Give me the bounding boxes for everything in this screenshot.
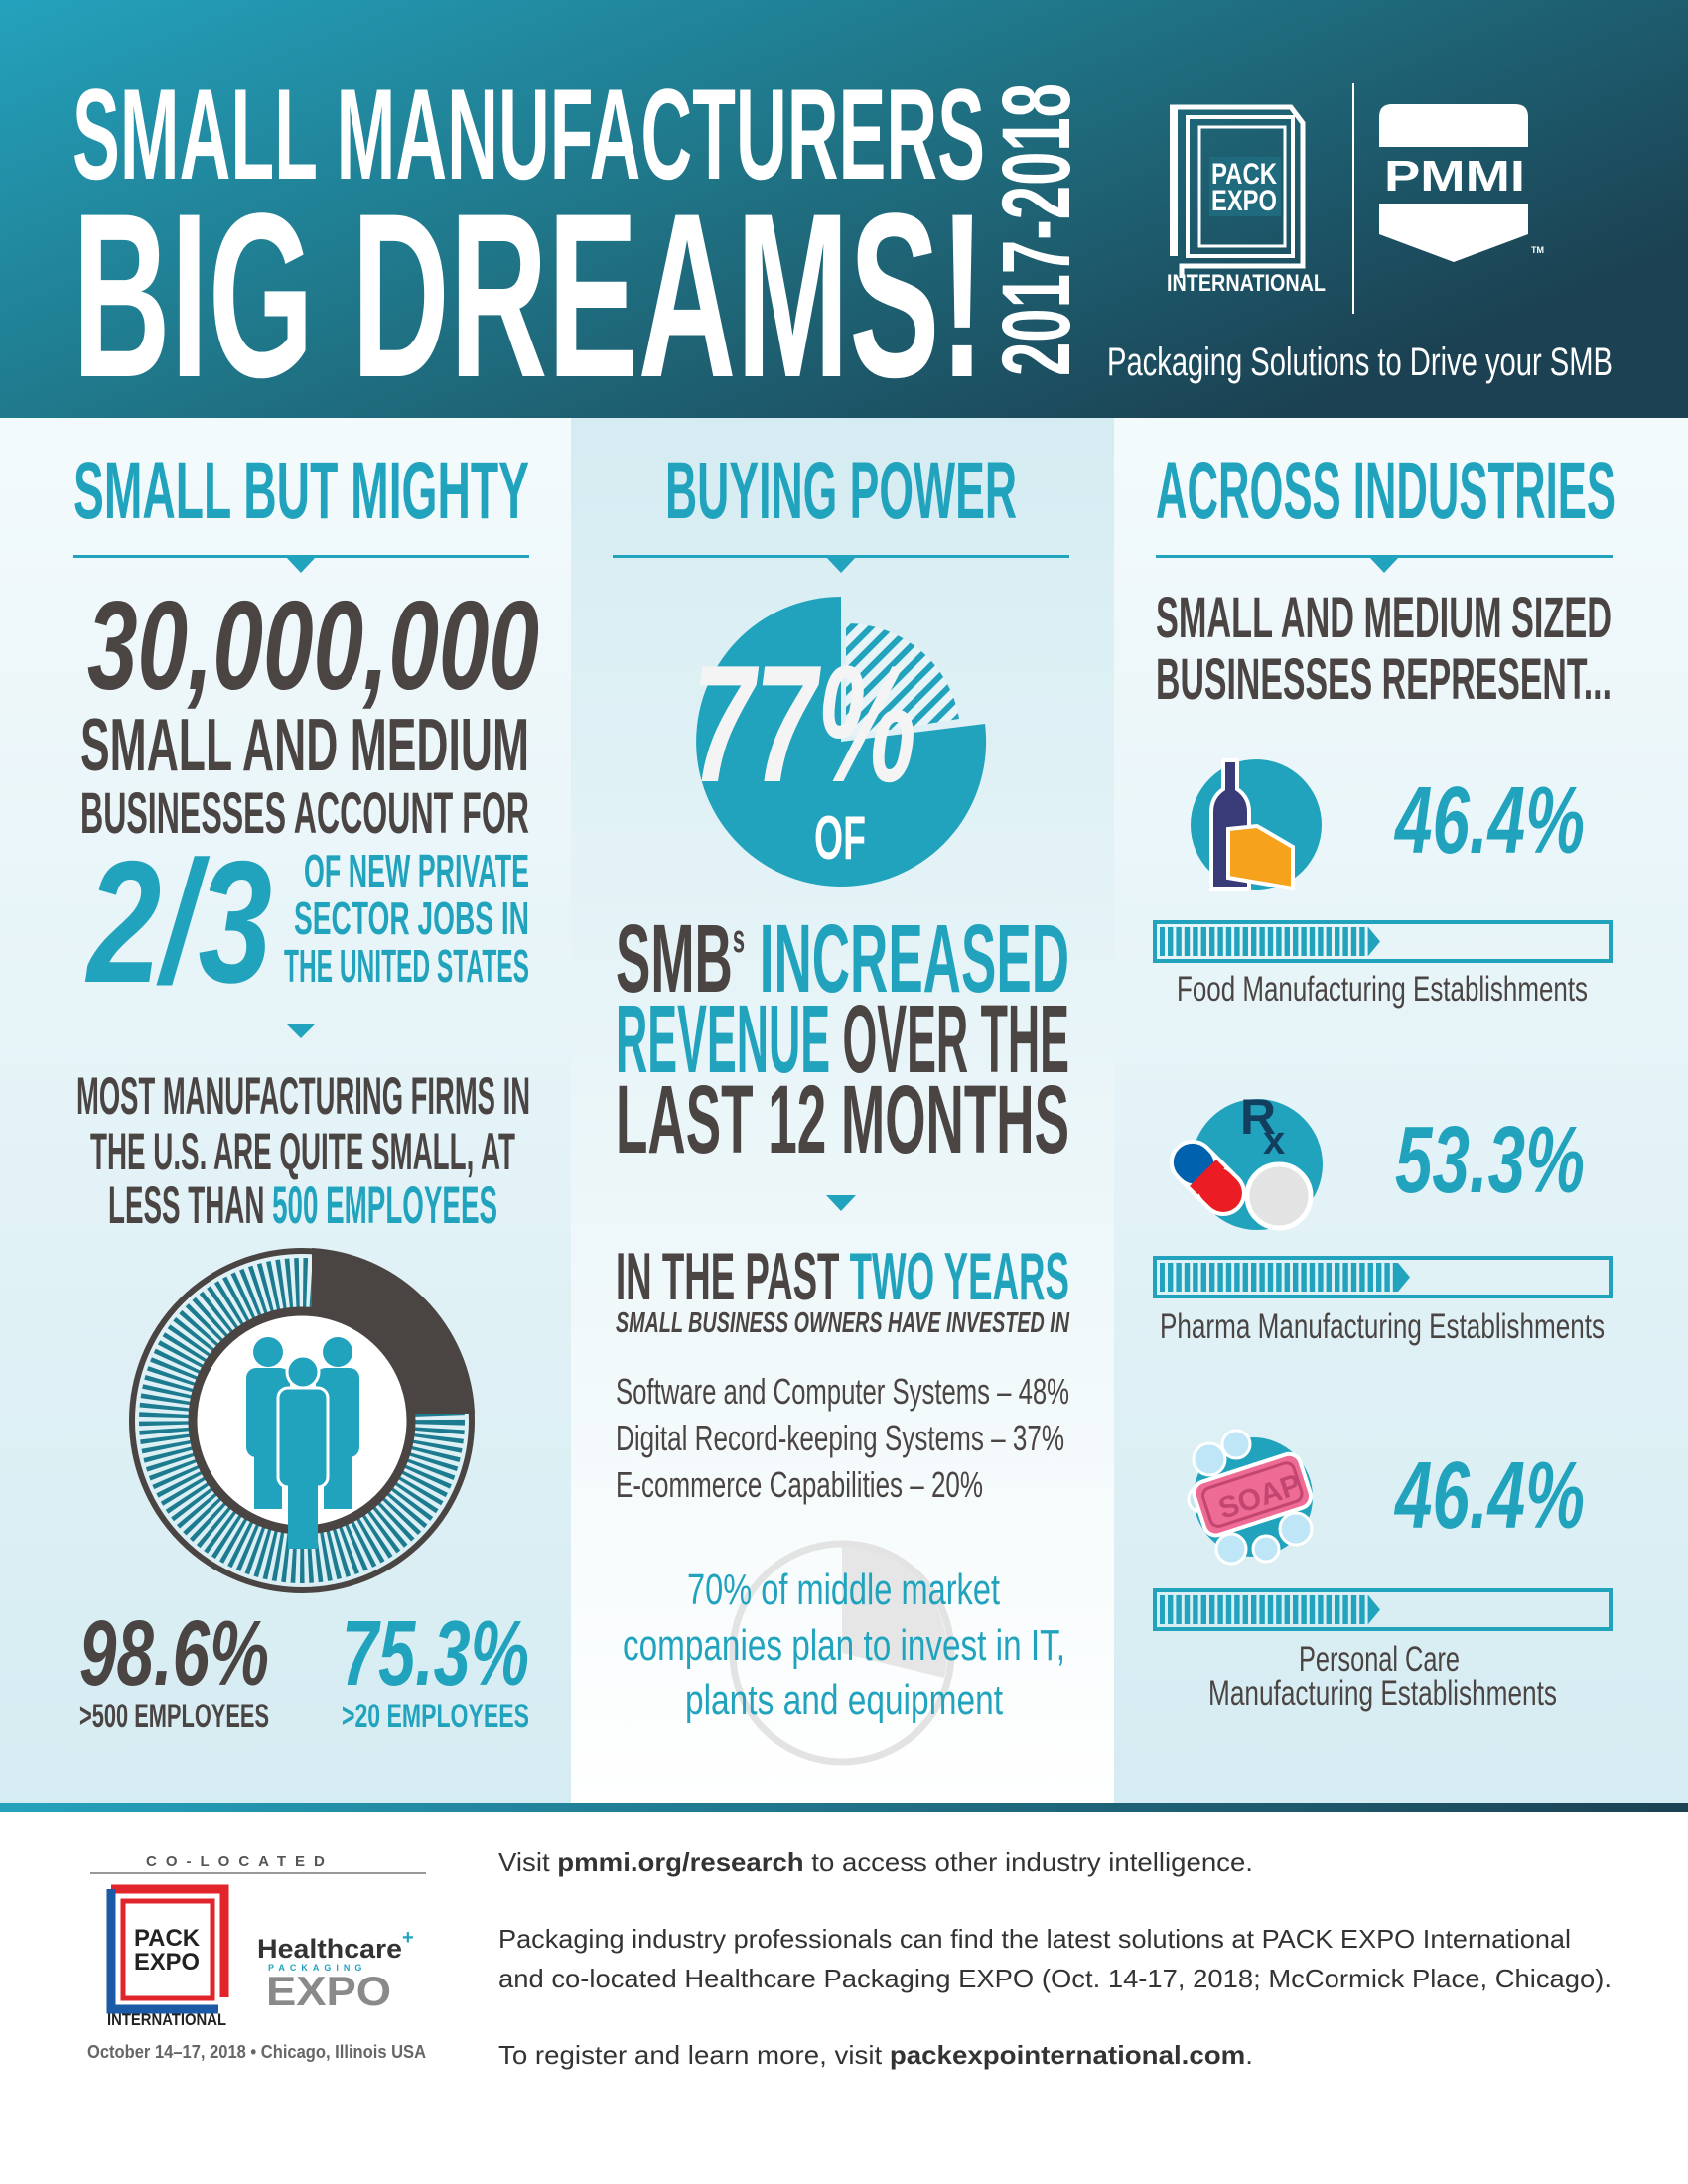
stat: food 46.4%: 46.4%: [1394, 767, 1585, 874]
text: past two years: IN THE PAST TWO YEARS: [616, 1239, 1069, 1314]
logo: pack expo international: EXPO: [1211, 185, 1277, 217]
panel: across industries: Manufacturing Establishments: [1208, 1674, 1557, 1712]
logo: pack expo international: [1167, 107, 1326, 297]
footer: co-located logos: [87, 1853, 426, 2062]
header banner: [0, 0, 1688, 427]
panel: buying power: REVENUE OVER THE: [616, 985, 1069, 1093]
logo: pack expo colour: PACK: [134, 1925, 201, 1952]
icon: pharma: [1160, 1089, 1323, 1230]
logo: pmmi shield: TM: [1531, 245, 1544, 255]
logo: pack expo international: INTERNATIONAL: [1167, 270, 1326, 297]
logo: healthcare packaging expo: EXPO: [266, 1968, 391, 2014]
panel: small but mighty: >500 EMPLOYEES: [79, 1698, 269, 1735]
panel: small but mighty: BUSINESSES ACCOUNT FOR: [80, 781, 529, 846]
stat: personal care 46.4%: 46.4%: [1394, 1442, 1585, 1549]
text: most firms small: MOST MANUFACTURING FIRMS IN: [76, 1067, 530, 1126]
panel: small but mighty: [73, 446, 539, 1735]
stat: 98.6%: 98.6%: [79, 1601, 269, 1705]
panel: across industries: [1155, 446, 1616, 1712]
logo: pmmi shield: PMMI: [1384, 152, 1525, 201]
panel: buying power: SMALL BUSINESS OWNERS HAVE INVESTED IN: [616, 1307, 1070, 1339]
pie chart 77%: [692, 597, 986, 887]
logo: healthcare packaging expo: [257, 1927, 414, 2014]
text: increased revenue: SMB: [616, 904, 830, 1013]
2/3 stat: 2/3: [85, 826, 272, 1020]
logo: pmmi shield: [1379, 104, 1544, 262]
big number: 30,000,000: [87, 575, 539, 716]
callout: 70% middle market: [623, 1566, 1065, 1724]
icon: people: [246, 1337, 359, 1549]
title: small manufacturers: SMALL MANUFACTURERS: [72, 62, 985, 206]
bar: food: [1155, 922, 1611, 961]
text: increased revenue: s: [733, 917, 745, 961]
icon: pharma: x: [1263, 1119, 1285, 1162]
panel: small but mighty: THE U.S. ARE QUITE SMALL, AT: [90, 1123, 515, 1181]
heading: BUYING POWER: [665, 446, 1017, 536]
bar: pharma: [1155, 1258, 1611, 1297]
logo: pack expo colour: EXPO: [134, 1949, 200, 1976]
stat: pharma 53.3%: 53.3%: [1395, 1107, 1585, 1213]
logo: pack expo international: PACK: [1211, 158, 1277, 191]
title: big dreams: BIG DREAMS!: [72, 165, 985, 427]
panel: small but mighty: OF NEW PRIVATE: [304, 845, 529, 896]
bar: personal care: [1155, 1590, 1611, 1629]
footer: co-located logos: October 14–17, 2018 • Chicago, Illinois USA: [87, 2042, 426, 2062]
panel: across industries: Personal Care: [1299, 1640, 1460, 1679]
pie chart 77%: OF: [814, 804, 866, 873]
footer: info text: and co-located Healthcare Packaging EXPO (Oct. 14-17, 2018; McCormick Place, Chicago).: [498, 1964, 1612, 1993]
panel: small but mighty: >20 EMPLOYEES: [342, 1698, 529, 1735]
panel: small but mighty: SMALL AND MEDIUM: [80, 703, 529, 786]
list: investments: E-commerce Capabilities – 20%: [616, 1464, 983, 1505]
callout: 70% middle market: companies plan to invest in IT,: [623, 1621, 1065, 1670]
icon: wine and cheese: [1191, 759, 1322, 890]
icon: faint clock: [733, 1544, 951, 1762]
text: increased revenue: INCREASED: [745, 904, 1069, 1013]
logo: healthcare packaging expo: Healthcare: [257, 1934, 402, 1964]
panel: buying power: LAST 12 MONTHS: [616, 1065, 1069, 1173]
donut chart: [132, 1248, 475, 1590]
logo: healthcare packaging expo: +: [402, 1927, 414, 1949]
panel: small but mighty: LESS THAN 500 EMPLOYEES: [108, 1176, 497, 1235]
footer: co-located logos: CO-LOCATED: [146, 1853, 334, 1870]
pie chart 77%: 77%: [692, 630, 916, 817]
list: investments: Digital Record-keeping Systems – 37%: [616, 1418, 1064, 1458]
panel backgrounds: [0, 418, 1688, 1803]
panel: small but mighty: SECTOR JOBS IN: [294, 892, 529, 944]
callout: 70% middle market: 70% of middle market: [687, 1566, 1000, 1614]
callout: 70% middle market: plants and equipment: [685, 1676, 1003, 1724]
panel: small but mighty: THE UNITED STATES: [284, 940, 529, 992]
logo: pack expo colour: INTERNATIONAL: [107, 2010, 226, 2029]
list: investments: [616, 1371, 1069, 1505]
footer: info text: Packaging industry professionals can find the latest solutions at PACK EXPO International: [498, 1924, 1571, 1954]
stat: 75.3%: 75.3%: [342, 1601, 529, 1705]
footer: info text: [498, 1847, 1612, 2070]
heading: SMALL BUT MIGHTY: [73, 446, 529, 536]
footer: info text: To register and learn more, visit packexpointernational.com .: [498, 2040, 1253, 2070]
footer: info text: Visit pmmi.org/research to access other industry intelligence.: [498, 1847, 1253, 1877]
panel: buying power: [613, 446, 1070, 1762]
icon: soap: SOAP: [1214, 1468, 1305, 1526]
list: investments: Software and Computer Systems – 48%: [616, 1371, 1069, 1412]
icon: soap: [1189, 1431, 1314, 1564]
logo: pack expo colour: [107, 1889, 226, 2029]
icon: pharma: R: [1240, 1089, 1276, 1145]
logo: healthcare packaging expo: PACKAGING: [268, 1963, 366, 1973]
